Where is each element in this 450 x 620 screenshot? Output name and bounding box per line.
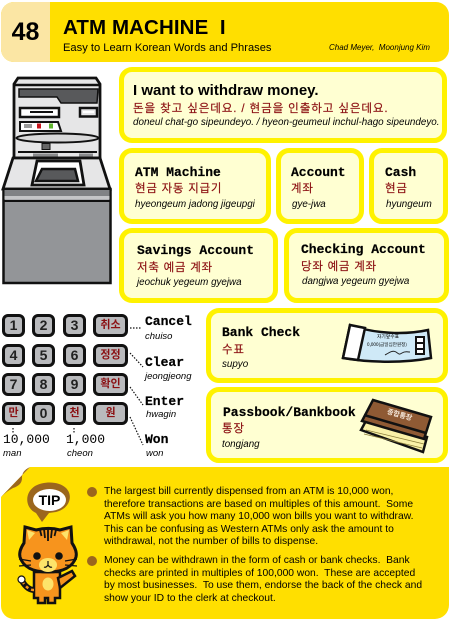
Korean: 계좌: [291, 183, 314, 195]
key grid: 0: [40, 405, 47, 421]
Korean: 현금: [385, 183, 408, 195]
authors: Chad Meyer, Moonjung Kim: [329, 43, 430, 52]
Korean: 수표: [222, 344, 245, 356]
key grid: 1: [10, 317, 17, 333]
label: 1,000: cheon: [67, 448, 93, 459]
subtitle: Easy to Learn Korean Words and Phrases: [63, 42, 272, 54]
term: Bank Check: [222, 325, 300, 340]
paragraph: withdrawal, not the number of bills to dispense.: [104, 536, 318, 547]
paragraph: show your ID to the clerk at checkout.: [104, 593, 276, 604]
paragraph: ATMs will ask you how many 10,000 won bills you want to withdraw.: [104, 511, 413, 522]
key grid: 취소: [100, 319, 121, 331]
paragraph: by most businesses. To use them, endorse the back of the check and: [104, 580, 422, 591]
label: 10,000: man: [3, 448, 21, 459]
label: clear: Clear: [145, 355, 184, 370]
panel: I want to withdraw money: [119, 67, 447, 143]
key grid: 6: [71, 347, 78, 363]
key grid: 3: [71, 317, 78, 333]
key grid: 천: [69, 407, 80, 419]
label: 10,000: [3, 432, 50, 459]
icon: tiger cat: [17, 525, 78, 604]
tip bullet 2: [87, 555, 422, 604]
term: Savings Account: [137, 243, 254, 258]
lesson number: [1, 2, 50, 62]
paragraph: checks are printed in multiples of 100,000 won. These are accepted: [104, 568, 415, 579]
panel: passbook: [206, 387, 448, 463]
paragraph: The largest bill currently dispensed from an ATM is 10,000 won,: [104, 486, 393, 497]
icon: passbook: [359, 398, 432, 454]
romanization: hyungeum: [386, 199, 432, 210]
label: 1,000: 1,000: [66, 432, 105, 447]
romanization: jeochuk yegeum gyejwa: [137, 277, 242, 288]
label: enter: Enter: [145, 394, 184, 409]
title: ATM MACHINE I: [63, 16, 226, 39]
keypad: [2, 314, 192, 459]
Korean: 현금 자동 지급기: [135, 183, 222, 195]
key grid: [2, 314, 128, 425]
key grid: 정정: [100, 349, 121, 361]
icon: bank check: 0,000(금일십만원정): [367, 341, 407, 348]
sentence heading: I want to withdraw money.: [133, 82, 319, 99]
panel: account: [276, 148, 364, 224]
header band: [1, 2, 449, 62]
paragraph: therefore transactions are based on multiples of this amount. Some: [104, 499, 413, 510]
panel background: [1, 467, 449, 619]
paragraph: [104, 555, 422, 604]
panel: savings account: [119, 228, 278, 303]
bullet: [87, 487, 97, 497]
label: cancel: Cancel: [145, 314, 192, 329]
lesson number: 48: [12, 18, 39, 46]
key grid: 2: [40, 317, 47, 333]
romanization: hyeongeum jadong jigeupgi: [135, 199, 255, 210]
label: won: Won: [145, 432, 168, 447]
label: cancel: [145, 314, 192, 342]
label: won: [144, 432, 168, 459]
romanization: gye-jwa: [292, 199, 326, 210]
key grid: 9: [71, 376, 78, 392]
panel: checking account: [284, 228, 449, 303]
label: enter: hwagin: [146, 409, 176, 420]
key grid: 만: [8, 407, 19, 419]
key grid: 5: [40, 347, 47, 363]
term: Checking Account: [301, 242, 426, 257]
romanization: doneul chat-go sipeundeyo. / hyeon-geumeul inchul-hago sipeundeyo.: [133, 117, 439, 128]
paragraph: This can be confusing as Western ATMs only ask the amount to: [104, 524, 394, 535]
label: cancel: chuiso: [145, 331, 172, 342]
tip bullet 1: [87, 486, 413, 547]
Korean sentence: 돈을 찾고 싶은데요. / 현금을 인출하고 싶은데요.: [133, 102, 388, 115]
label: 10,000: 10,000: [3, 432, 50, 447]
term: ATM Machine: [135, 165, 221, 180]
panel: tip: [1, 467, 449, 619]
key grid: 7: [10, 376, 17, 392]
icon: ATM machine: [1, 76, 112, 284]
key grid: 확인: [100, 378, 121, 390]
icon: bank check: 자기앞수표: [377, 333, 400, 340]
label: 1,000: [66, 432, 105, 459]
Korean: 통장: [222, 423, 245, 435]
paragraph: [104, 486, 413, 547]
icon: bank check: [342, 323, 432, 363]
key grid: 원: [105, 407, 116, 419]
key grid: 4: [10, 347, 17, 363]
romanization: tongjang: [222, 439, 260, 450]
leader lines: [12, 327, 144, 446]
term: Passbook/Bankbook: [223, 405, 356, 420]
panel: cash: [369, 148, 448, 224]
icon: TIP speech bubble: TIP: [39, 492, 60, 508]
term: Account: [291, 165, 346, 180]
icon: passbook: 종합통장: [386, 407, 414, 424]
bullet: [87, 556, 97, 566]
Korean: 저축 예금 계좌: [137, 262, 213, 274]
term: Cash: [385, 165, 416, 180]
icon: TIP speech bubble: [27, 482, 70, 522]
panel: bank check: [206, 308, 448, 383]
key grid: 8: [40, 376, 47, 392]
paragraph: Money can be withdrawn in the form of cash or bank checks. Bank: [104, 555, 410, 566]
label: enter: [145, 394, 184, 420]
romanization: supyo: [222, 359, 248, 370]
label: clear: [144, 355, 192, 382]
panel: ATM machine: [119, 148, 271, 224]
romanization: dangjwa yegeum gyejwa: [302, 276, 409, 287]
label: clear: jeongjeong: [145, 371, 192, 382]
label: won: won: [146, 448, 163, 459]
Korean: 당좌 예금 계좌: [301, 261, 377, 273]
